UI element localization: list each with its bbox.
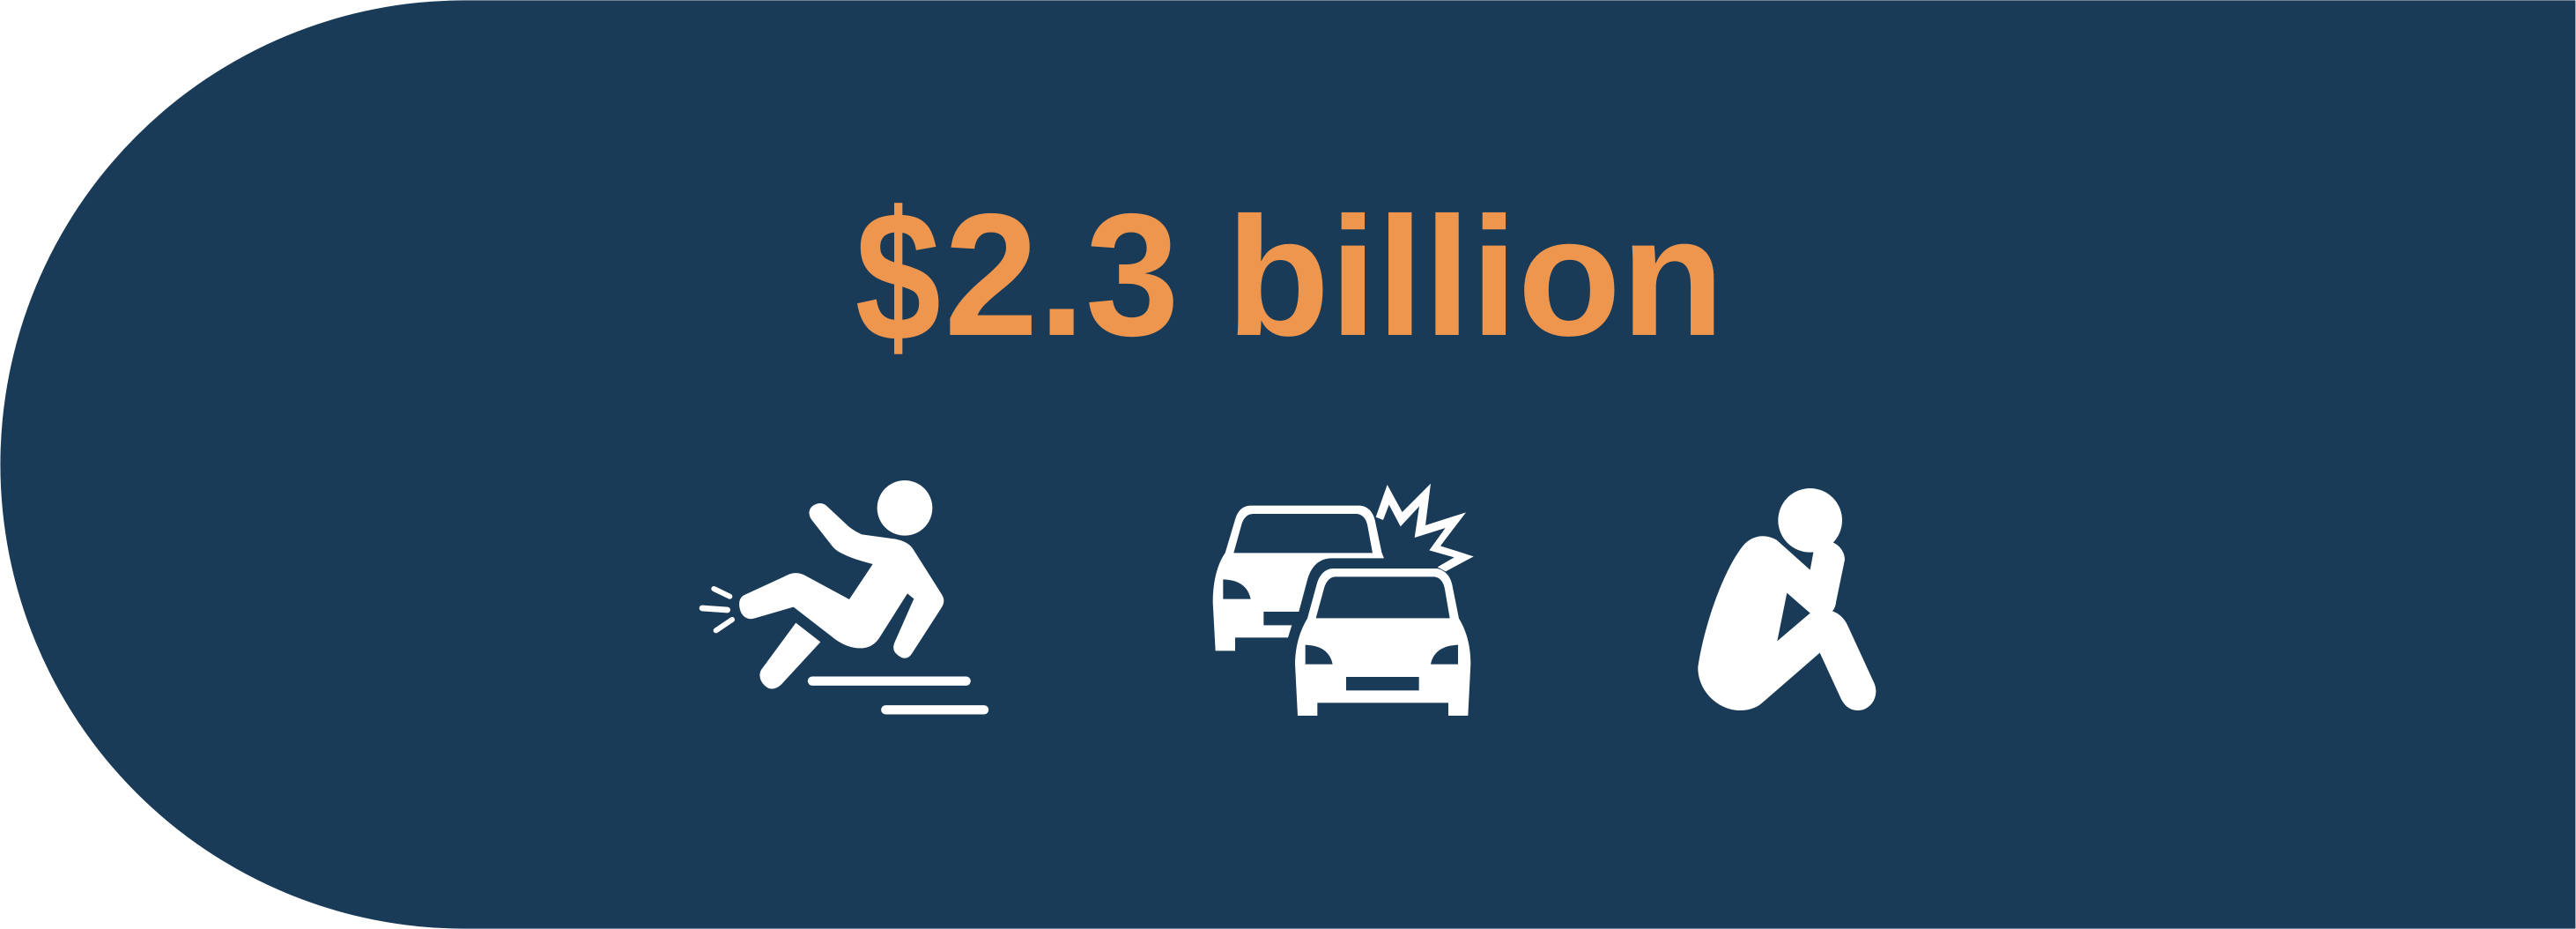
title: cost figure: 2.3 xyxy=(944,178,1180,373)
icon: two cars colliding xyxy=(1213,484,1474,716)
icon: person sitting with head in hand xyxy=(1698,488,1876,710)
icon: person slipping and falling xyxy=(702,480,984,710)
title: cost figure: $ xyxy=(855,173,941,380)
title: cost figure: billion xyxy=(1226,182,1724,371)
title: cost figure xyxy=(855,173,1724,380)
